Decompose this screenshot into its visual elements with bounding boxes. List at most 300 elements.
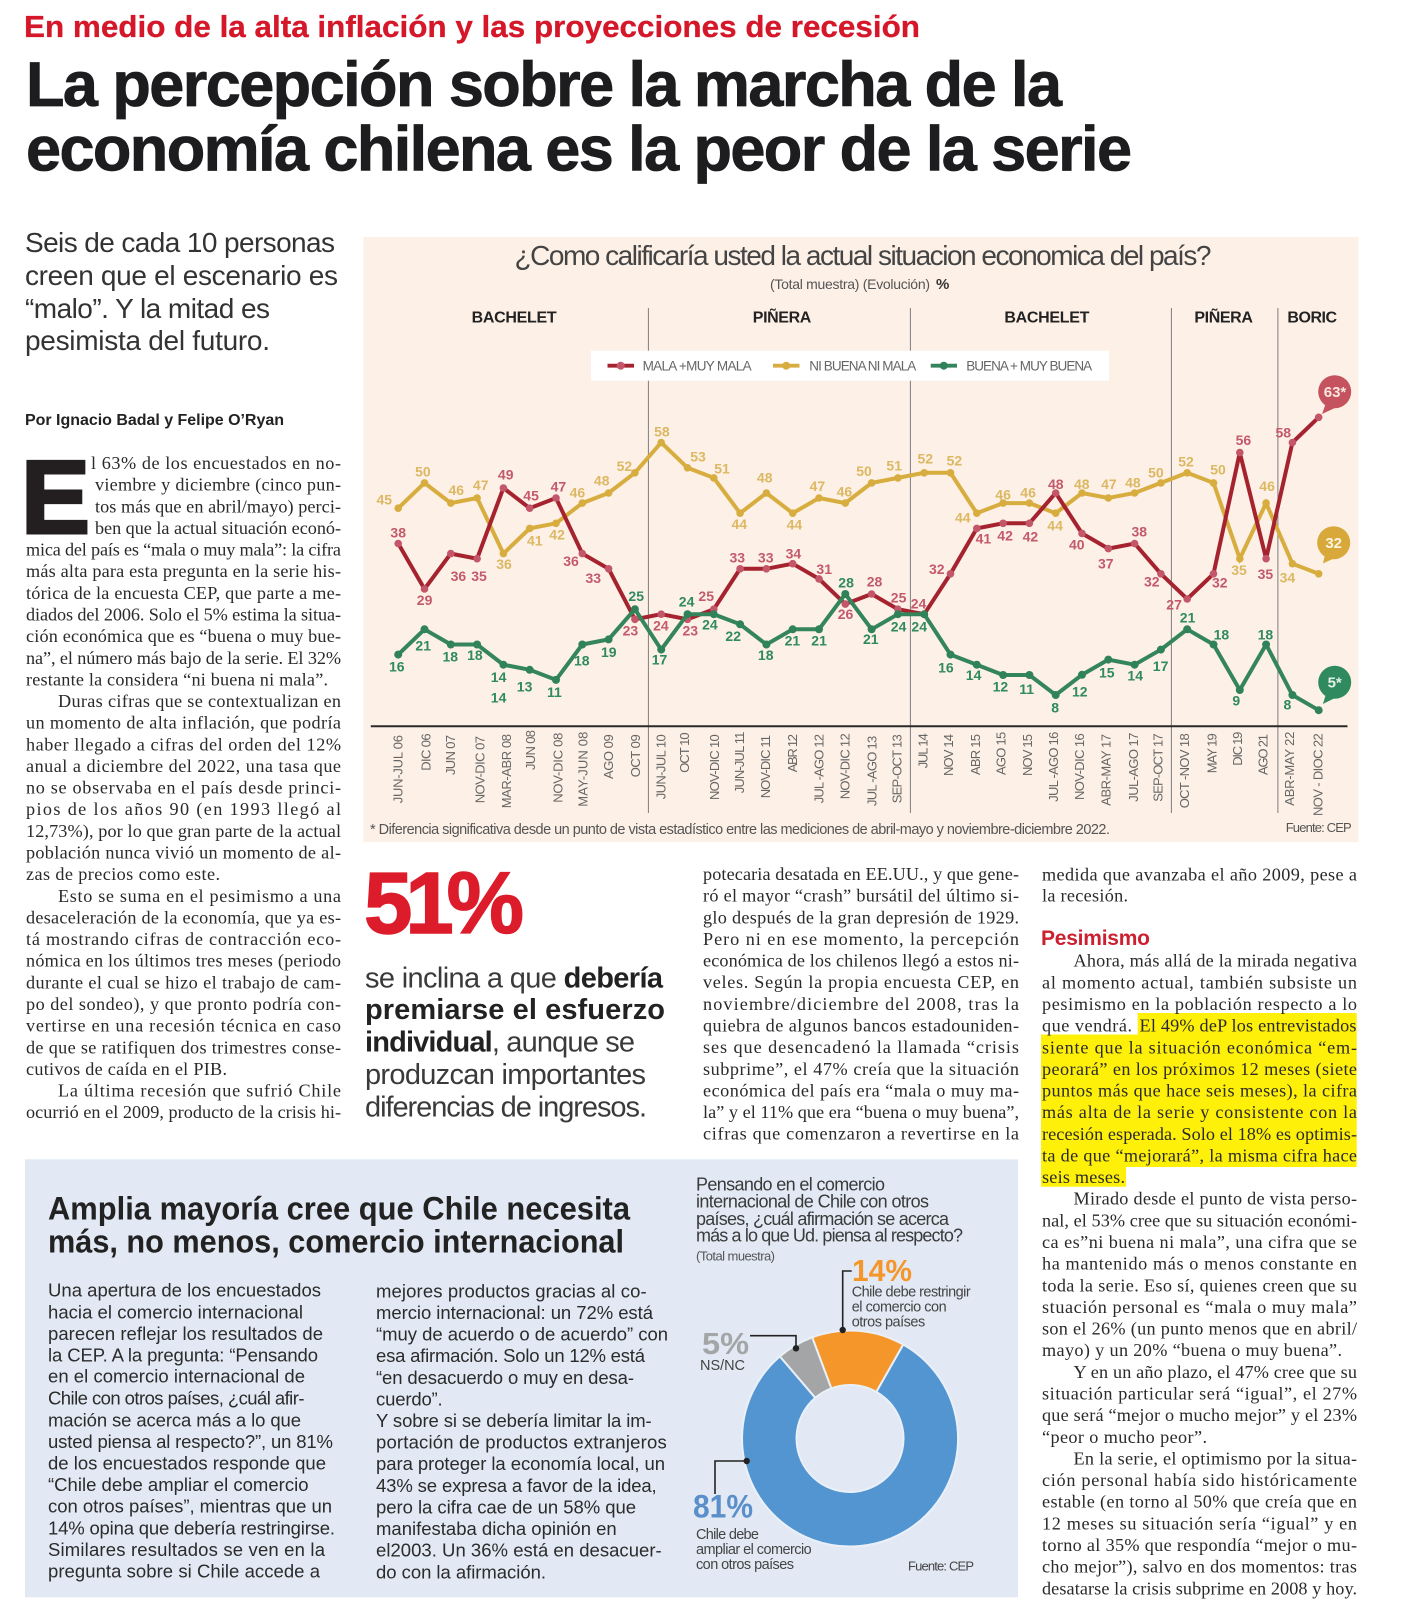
article text column 4 body: que será “mejor o mucho mejor” y el 23%	[1042, 1405, 1357, 1425]
box text column 1: con otros países”, mientras que un	[48, 1496, 332, 1517]
value labels: ni buena ni mala: 53	[690, 449, 706, 465]
article text column 4 body: estable (en torno al 50% que creía que en	[1042, 1492, 1357, 1513]
x axis date labels: MAR-ABR 08	[499, 734, 514, 808]
box text column 1: la CEP. A la pregunta: “Pensando	[48, 1345, 318, 1366]
value labels: buena + muy buena: 14	[966, 667, 982, 683]
article text column 1: Duras cifras que se contextualizan en	[58, 691, 341, 711]
value labels: ni buena ni mala: 41	[527, 532, 543, 548]
value labels: buena + muy buena: 14	[491, 690, 507, 706]
article text column 4 body: más alta de la serie y consistente con la	[1042, 1102, 1357, 1122]
box text column 2: esa afirmación. Solo un 12% está	[376, 1345, 646, 1366]
article text column 3: veles. Según la propia encuesta CEP, en	[703, 972, 1019, 992]
x axis date labels: SEP-OCT 13	[889, 734, 904, 803]
value labels: buena + muy buena: 22	[725, 628, 741, 644]
value labels: mala + muy mala: 37	[1098, 555, 1114, 571]
value labels: buena + muy buena: 14	[491, 669, 507, 685]
callout bubble: 5 percent: 5*	[1328, 675, 1342, 692]
article text column 1: mica del país es “mala o muy mala”: la cifra	[26, 540, 341, 560]
x axis date labels: AGO 21	[1256, 734, 1270, 775]
x axis date labels: JUL -AGO 16	[1046, 732, 1061, 802]
x axis date labels: AGO 09	[601, 734, 616, 779]
value labels: ni buena ni mala: 48	[757, 470, 773, 486]
value labels: mala + muy mala: 25	[698, 588, 714, 604]
x axis date labels: JUN-JUL 06	[391, 735, 406, 803]
value labels: ni buena ni mala: 35	[1231, 562, 1247, 578]
article text column 4 body: Ahora, más allá de la mirada negativa	[1074, 951, 1357, 971]
value labels: mala + muy mala: 23	[683, 623, 698, 639]
article text column 4 top: la recesión.	[1042, 886, 1128, 906]
value labels: mala + muy mala: 33	[730, 550, 745, 566]
box text column 2: “en desacuerdo o muy en desa-	[376, 1367, 634, 1388]
value labels: ni buena ni mala: 47	[473, 477, 489, 493]
x axis date labels: ABR 15	[968, 734, 983, 775]
byline: Por Ignacio Badal y Felipe O’Ryan	[25, 412, 284, 429]
article text column 1: zas de precios como este.	[26, 864, 220, 884]
article text column 1: ción económica que es “buena o muy bue-	[26, 626, 341, 646]
value labels: buena + muy buena: 21	[415, 638, 431, 654]
value labels: mala + muy mala: 35	[1258, 566, 1273, 582]
value labels: mala + muy mala: 45	[523, 487, 539, 503]
x axis date labels: NOV-DIC 16	[1072, 733, 1087, 800]
x axis date labels: AGO 15	[994, 732, 1008, 775]
value labels: mala + muy mala: 38	[390, 525, 406, 541]
donut chart	[742, 1330, 958, 1547]
value labels: ni buena ni mala: 46	[1020, 485, 1036, 501]
value labels: ni buena ni mala: 44	[787, 516, 802, 532]
box text column 2: manifestaba dicha opinión en	[376, 1518, 617, 1539]
segment: 5% NS/NC	[780, 1337, 831, 1398]
value labels: mala + muy mala: 34	[786, 546, 801, 562]
x axis date labels: DIC 06	[418, 733, 433, 771]
article text column 1: cutivos de caída en el PIB.	[26, 1059, 227, 1079]
value labels: ni buena ni mala: 36	[496, 556, 512, 572]
x axis date labels: ABR-MAY 17	[1098, 734, 1113, 806]
subtitle intro text	[25, 227, 338, 356]
x axis date labels: NOV-DIC 10	[707, 734, 722, 800]
value labels: ni buena ni mala: 52	[617, 458, 632, 474]
government period labels: PIÑERA	[1194, 307, 1253, 327]
donut label: 14%: otros países	[852, 1315, 925, 1331]
value labels: ni buena ni mala: 58	[654, 424, 670, 440]
article text column 4 body: ha mantenido más o menos constante en	[1042, 1254, 1357, 1274]
article text column 4 body: siente que la situación económica “em-	[1042, 1037, 1357, 1057]
article text column 3: potecaria desatada en EE.UU., y que gene-	[703, 864, 1019, 884]
box heading: más, no menos, comercio internacional	[48, 1224, 624, 1260]
value labels: mala + muy mala: 25	[891, 589, 907, 605]
article text column 1: restante la considera “ni buena ni mala”.	[26, 669, 328, 689]
value labels: buena + muy buena: 18	[574, 653, 590, 669]
value labels: mala + muy mala: 23	[623, 623, 638, 639]
value labels: buena + muy buena: 18	[1258, 626, 1273, 642]
pull quote text: se inclina a que debería	[365, 962, 664, 994]
value labels: mala + muy mala: 28	[867, 573, 882, 589]
x axis date labels: JUN 08	[523, 730, 538, 770]
article text column 1: más alta para esta pregunta en la serie his-	[26, 561, 341, 581]
value labels: buena + muy buena: 14	[1127, 668, 1143, 684]
value labels: mala + muy mala	[390, 425, 1291, 639]
article text column 3	[703, 864, 1019, 1144]
x axis date labels: OCT 10	[677, 732, 692, 773]
value labels: buena + muy buena: 21	[1180, 610, 1196, 626]
box text column 1: parecen reflejar los resultados de	[48, 1323, 323, 1344]
x axis date labels: ABR-MAY 22	[1282, 732, 1297, 806]
x axis date labels: NOV-DIC 07	[472, 736, 488, 803]
article text column 3: noviembre/diciembre del 2008, tras la	[703, 994, 1019, 1014]
value labels: ni buena ni mala: 44	[732, 516, 747, 532]
x axis date labels: OCT 09	[628, 734, 643, 777]
x axis date labels: NOV 15	[1020, 734, 1035, 776]
article text column 1: 12,73%), por lo que gran parte de la actual	[26, 821, 341, 842]
x axis date labels: NOV - DIOC 22	[1310, 733, 1325, 816]
article text column 3: económica del país era “mala o muy ma-	[703, 1080, 1019, 1100]
box text column 2: Y sobre si se debería limitar la im-	[376, 1410, 652, 1431]
article text column 4 body: situación particular será “igual”, el 27%	[1042, 1384, 1357, 1404]
article text column 4 body: 12 meses su situación sería “igual” y en	[1042, 1513, 1357, 1533]
box text column 1: Una apertura de los encuestados	[48, 1280, 321, 1301]
value labels: mala + muy mala: 29	[417, 592, 433, 608]
article text column 3: ró el mayor “crash” bursátil del último si-	[703, 886, 1019, 906]
value labels: mala + muy mala: 41	[976, 530, 991, 546]
box text column 1: “Chile debe ampliar el comercio	[48, 1474, 308, 1495]
box text column 1: Chile con otros países, ¿cuál afir-	[48, 1388, 304, 1409]
value labels: mala + muy mala: 33	[586, 570, 601, 586]
callout bubble: 5 percent	[1318, 666, 1351, 704]
donut label: 5%	[700, 1326, 749, 1374]
article text column 4 body: puntos más que hace seis meses), la cifra	[1042, 1080, 1357, 1102]
value labels: mala + muy mala: 26	[838, 606, 853, 622]
value labels: ni buena ni mala: 50	[1210, 462, 1226, 478]
value labels: ni buena ni mala: 50	[856, 463, 872, 479]
article text column 1	[26, 453, 341, 1122]
value labels: buena + muy buena: 24	[702, 617, 718, 633]
chart subtitle: (Total muestra) (Evolución)	[770, 276, 930, 292]
donut question text: más a lo que Ud. piensa al respecto?	[696, 1226, 963, 1246]
article text column 4 top: medida que avanzaba el año 2009, pese a	[1042, 865, 1357, 885]
value labels: mala + muy mala: 36	[451, 568, 466, 584]
article text column 4 body: cho mejor”), salvo en dos momentos: tras	[1042, 1557, 1357, 1578]
article text column 3: Pero ni en ese momento, la percepción	[703, 929, 1019, 949]
box text column 2: para proteger la economía local, un	[376, 1453, 665, 1474]
panel: international trade box	[25, 1159, 1018, 1597]
x axis date labels: NOV 14	[941, 734, 956, 776]
value labels: ni buena ni mala: 46	[449, 482, 464, 498]
x axis date labels: MAY-JUN 08	[576, 732, 591, 807]
article text column 4 top	[1042, 865, 1357, 906]
value labels: ni buena ni mala: 34	[1280, 570, 1295, 586]
donut question text: países, ¿cuál afirmación se acerca	[696, 1209, 950, 1229]
value labels: mala + muy mala: 35	[471, 568, 487, 584]
x axis date labels: JUN-JUL 10	[653, 734, 668, 799]
value labels: ni buena ni mala: 44	[955, 509, 971, 525]
legend: BUENA + MUY BUENA	[966, 358, 1092, 374]
chart source: Fuente: CEP	[1286, 820, 1352, 835]
x axis date labels: DIC 19	[1230, 732, 1245, 766]
value labels: mala + muy mala: 32	[1212, 574, 1228, 590]
x axis date labels: JUL -AGO 13	[865, 736, 880, 806]
leader line: 81%	[715, 1458, 750, 1494]
box text column 2: pero la cifra cae de un 58% que	[376, 1496, 636, 1517]
article text column 4 body: que vendrá.	[1042, 1016, 1132, 1036]
value labels: mala + muy mala: 56	[1236, 432, 1251, 448]
callout bubble: 32 percent	[1317, 526, 1350, 564]
value labels: mala + muy mala: 58	[1276, 425, 1291, 441]
series: mala + muy mala	[398, 417, 1319, 619]
box text column 1: hacia el comercio internacional	[48, 1301, 303, 1322]
government period labels: BACHELET	[472, 310, 557, 327]
value labels: buena + muy buena: 16	[938, 660, 954, 676]
box text column 1: Similares resultados se ven en la	[48, 1539, 326, 1560]
article text column 4 body: peorará” en los próximos 12 meses (siete	[1042, 1059, 1357, 1080]
article text column 4 body: ca es”ni buena ni mala”, una cifra que se	[1042, 1232, 1357, 1252]
value labels: buena + muy buena: 24	[891, 618, 907, 634]
article text column 4 body: seis meses.	[1042, 1167, 1125, 1187]
government period labels	[472, 307, 1338, 327]
value labels: ni buena ni mala	[377, 424, 1295, 586]
article text column 1: haber llegado a cifras del orden del 12%	[26, 734, 341, 754]
box text column 2: cuerdo”.	[376, 1388, 443, 1409]
article text column 3: cifras que comenzaron a revertirse en la	[703, 1124, 1019, 1144]
x axis date labels: MAY 19	[1204, 733, 1220, 773]
article text column 1: Esto se suma en el pesimismo a una	[58, 886, 341, 906]
article text column 3: la” y el 11% que era “buena o muy buena”,	[703, 1102, 1019, 1122]
box text column 2: el2003. Un 36% está en desacuer-	[376, 1540, 662, 1561]
article text column 1: viembre y diciembre (cinco pun-	[95, 475, 341, 496]
value labels: ni buena ni mala: 47	[810, 478, 825, 494]
main title: La percepción sobre la marcha de la	[26, 50, 1063, 120]
donut label: 81%: 81%	[693, 1489, 753, 1525]
value labels: ni buena ni mala: 46	[1259, 478, 1275, 494]
government period labels: BACHELET	[1004, 310, 1090, 327]
box text column 2: mercio internacional: un 72% está	[376, 1302, 654, 1323]
value labels: buena + muy buena: 17	[1153, 658, 1169, 674]
x axis date labels: JUN 07	[443, 735, 458, 775]
value labels: buena + muy buena: 15	[1099, 664, 1115, 680]
chart title: ¿Como calificaría usted la actual situacion economica del país?	[514, 240, 1212, 271]
article text column 1: durante el cual se hizo el trabajo de cam-	[26, 972, 341, 992]
donut label: 5%: NS/NC	[700, 1358, 745, 1374]
value labels: mala + muy mala: 47	[551, 479, 566, 495]
main title: economía chilena es la peor de la serie	[26, 115, 1132, 185]
value labels: buena + muy buena: 12	[1072, 683, 1088, 699]
article text column 4 body	[1042, 951, 1358, 1598]
value labels: ni buena ni mala: 45	[377, 491, 392, 507]
value labels: buena + muy buena: 13	[517, 679, 533, 695]
x axis date labels: JUL -AGO 12	[812, 734, 827, 803]
article text column 3: económica de los chilenos llegó a estos ni-	[703, 951, 1019, 971]
segment: 81% ampliar	[742, 1344, 958, 1547]
article text column 4 body: toda la serie. Eso sí, quienes creen que su	[1042, 1275, 1357, 1295]
value labels: buena + muy buena: 21	[811, 632, 827, 648]
article text column 4 body: desatarse la crisis subprime en 2008 y hoy.	[1042, 1578, 1357, 1598]
pull quote text: premiarse el esfuerzo	[365, 994, 665, 1026]
article text column 4 body: ción personal había sido históricamente	[1042, 1470, 1357, 1490]
value labels: mala + muy mala: 31	[816, 561, 832, 577]
value labels: mala + muy mala: 24	[911, 595, 926, 611]
box heading	[48, 1190, 630, 1260]
box text column 2: 43% se expresa a favor de la idea,	[376, 1475, 657, 1496]
box text column 2: do con la afirmación.	[376, 1561, 546, 1582]
box text column 1: usted piensa al respecto?”, un 81%	[48, 1431, 333, 1452]
subtitle intro text: Seis de cada 10 personas	[25, 227, 335, 258]
value labels: buena + muy buena: 19	[601, 644, 617, 660]
article text column 4 body: Mirado desde el punto de vista perso-	[1074, 1189, 1357, 1209]
big number 51%: 51%	[364, 855, 524, 952]
value labels: buena + muy buena: 17	[652, 651, 667, 667]
box text column 1: de los encuestados responde que	[48, 1452, 326, 1474]
box heading: Amplia mayoría cree que Chile necesita	[48, 1190, 630, 1226]
value labels: buena + muy buena: 24	[679, 594, 695, 610]
value labels: ni buena ni mala: 52	[1178, 453, 1194, 469]
yellow highlight	[1041, 1013, 1357, 1187]
value labels: mala + muy mala: 49	[498, 466, 514, 482]
article text column 1: de que se ratifiquen dos trimestres conse-	[26, 1037, 341, 1057]
donut label: 14%	[852, 1253, 971, 1331]
leader line: 14%	[840, 1271, 852, 1333]
legend	[591, 351, 1109, 381]
article text column 1: vertirse en una recesión técnica en caso	[26, 1016, 341, 1036]
article text column 1: un momento de alta inflación, que podría	[26, 713, 341, 733]
value labels: buena + muy buena: 18	[443, 649, 458, 665]
value labels: buena + muy buena: 9	[1232, 692, 1240, 708]
article text column 4 body: pesimismo en la población respecto a lo	[1042, 994, 1357, 1014]
value labels: mala + muy mala: 24	[653, 617, 669, 633]
value labels: ni buena ni mala: 42	[549, 526, 565, 542]
legend: MALA +MUY MALA	[643, 358, 752, 374]
subtitle intro text: creen que el escenario es	[25, 260, 338, 291]
article text column 1: tos más que en abril/mayo) perci-	[95, 496, 341, 517]
article text column 4 body: El 49% deP los entrevistados	[1140, 1016, 1356, 1036]
article text column 4 body: “peor o mucho peor”.	[1042, 1427, 1207, 1447]
article text column 1: tá mostrando cifras de contracción eco-	[26, 929, 341, 949]
box text column 2: mejores productos gracias al co-	[376, 1280, 647, 1301]
box text column 1: mación se acerca más a lo que	[48, 1409, 301, 1430]
panel: line chart of economic situation	[363, 237, 1358, 842]
value labels: buena + muy buena: 8	[1051, 700, 1059, 716]
article text column 3: subprime”, el 47% creía que la situación	[703, 1059, 1019, 1079]
value labels: ni buena ni mala: 52	[947, 453, 962, 469]
government period labels: BORIC	[1287, 310, 1338, 327]
box text column 2	[376, 1280, 668, 1582]
value labels: ni buena ni mala: 50	[415, 464, 431, 480]
pull quote text	[365, 962, 665, 1124]
x axis date labels: JUL 14	[915, 733, 930, 768]
pull quote text: diferencias de ingresos.	[365, 1092, 647, 1124]
article text column 4 body: stuación personal es “mala o muy mala”	[1042, 1297, 1357, 1317]
value labels: buena + muy buena: 18	[467, 647, 483, 663]
article text column 1: anual a diciembre del 2022, una tasa que	[26, 756, 341, 776]
x axis line	[371, 725, 1348, 727]
value labels: buena + muy buena: 8	[1284, 697, 1292, 713]
value labels: buena + muy buena: 11	[547, 684, 562, 700]
value labels: buena + muy buena: 24	[911, 618, 927, 634]
article text column 1: población nunca vivió un momento de al-	[26, 842, 341, 862]
donut question text	[696, 1175, 963, 1264]
donut label: 81%: Chile debe	[696, 1527, 759, 1543]
x axis date labels: ABR 12	[785, 734, 800, 772]
value labels: ni buena ni mala: 46	[570, 484, 585, 500]
article text column 4 body: nal, el 53% cree que su situación económi-	[1042, 1210, 1357, 1230]
x axis date labels: NOV-DIC 08	[550, 733, 565, 803]
value labels: ni buena ni mala: 47	[1101, 476, 1117, 492]
value labels: buena + muy buena: 11	[1019, 681, 1034, 697]
donut question text: internacional de Chile con otros	[696, 1192, 929, 1212]
value labels: ni buena ni mala: 44	[1047, 518, 1063, 534]
legend: NI BUENA NI MALA	[809, 358, 916, 374]
main title	[26, 50, 1132, 185]
value labels: mala + muy mala: 38	[1132, 524, 1147, 540]
box text column 2: “muy de acuerdo o de acuerdo” con	[376, 1324, 668, 1345]
value labels: mala + muy mala: 36	[563, 553, 579, 569]
donut question text: (Total muestra)	[696, 1249, 775, 1264]
article text column 1: tórica de la encuesta CEP, que parte a me-	[26, 583, 341, 603]
series: ni buena ni mala	[398, 442, 1319, 574]
donut label: 81%: ampliar el comercio	[696, 1542, 812, 1558]
article text column 4 body: torno al 35% que respondía “mejor o mu-	[1042, 1535, 1357, 1555]
value labels: ni buena ni mala: 46	[995, 486, 1011, 502]
value labels: buena + muy buena: 18	[758, 647, 774, 663]
box text column 1: 14% opina que debería restringirse.	[48, 1517, 335, 1538]
x axis date labels	[391, 730, 1325, 816]
value labels: ni buena ni mala: 51	[714, 460, 730, 476]
donut label: 81%: con otros países	[696, 1557, 794, 1573]
donut label: 14%: 14%	[852, 1253, 912, 1288]
value labels: mala + muy mala: 48	[1048, 476, 1064, 492]
box text column 1: pregunta sobre si Chile accede a	[48, 1560, 321, 1582]
x axis date labels: SEP-OCT 17	[1150, 733, 1165, 802]
value labels: mala + muy mala: 42	[997, 528, 1013, 544]
article text column 4 body: mayo) y un 20% “buena o muy buena”.	[1042, 1340, 1342, 1361]
x axis date labels: JUN-JUL 11	[732, 732, 747, 793]
x axis date labels: JUL-AGO 17	[1126, 733, 1141, 802]
value labels: ni buena ni mala: 48	[1074, 476, 1090, 492]
value labels: ni buena ni mala: 51	[886, 457, 902, 473]
article text column 1: nómica en los últimos tres meses (periodo	[26, 951, 341, 972]
box text column 1: en el comercio internacional de	[48, 1366, 305, 1387]
article text column 4 body: al momento actual, también subsiste un	[1042, 972, 1357, 992]
series: buena + muy buena	[398, 594, 1319, 710]
callout bubble: 63 percent: 63*	[1324, 384, 1346, 401]
article text column 1: pios de los años 90 (en 1993 llegó al	[26, 799, 341, 820]
article text column 3: ses que desencadenó la llamada “crisis	[703, 1037, 1019, 1057]
chart subtitle: %	[936, 276, 949, 293]
value labels: buena + muy buena: 25	[628, 588, 644, 604]
article text column 1: ben que la actual situación econó-	[95, 518, 341, 538]
value labels: buena + muy buena: 21	[785, 632, 800, 648]
subtitle intro text: “malo”. Y la mitad es	[25, 293, 270, 324]
value labels: mala + muy mala: 40	[1069, 537, 1085, 553]
article text column 1: desaceleración de la economía, que ya es-	[26, 907, 341, 927]
value labels: mala + muy mala: 27	[1166, 596, 1182, 612]
article text column 4 body: En la serie, el optimismo por la situa-	[1074, 1448, 1357, 1468]
article text column 4 body: Y en un año plazo, el 47% cree que su	[1074, 1362, 1357, 1382]
x axis date labels: OCT -NOV 18	[1177, 733, 1192, 808]
value labels: buena + muy buena	[389, 575, 1292, 716]
value labels: ni buena ni mala: 52	[918, 451, 933, 467]
value labels: ni buena ni mala: 50	[1148, 465, 1164, 481]
value labels: mala + muy mala: 33	[758, 550, 774, 566]
article text column 4 body: recesión esperada. Solo el 18% es optimis-	[1042, 1124, 1357, 1144]
pull quote text: produzcan importantes	[365, 1059, 646, 1091]
donut label: 14%: el comercio con	[852, 1300, 947, 1316]
value labels: mala + muy mala: 32	[929, 561, 945, 577]
value labels: buena + muy buena: 12	[993, 679, 1008, 695]
pull quote text: individual, aunque se	[365, 1027, 635, 1059]
chart footnote: * Diferencia significativa desde un punto de vista estadístico entre las mediciones de abril-mayo y noviembre-diciembre 2022.	[370, 822, 1110, 838]
x axis date labels: NOV-DIC 11	[758, 735, 773, 798]
value labels: buena + muy buena: 21	[863, 631, 879, 647]
article text column 1: na”, el número más bajo de la serie. El 32%	[26, 648, 341, 668]
article text column 1: no se observaba en el país desde princi-	[26, 778, 341, 798]
